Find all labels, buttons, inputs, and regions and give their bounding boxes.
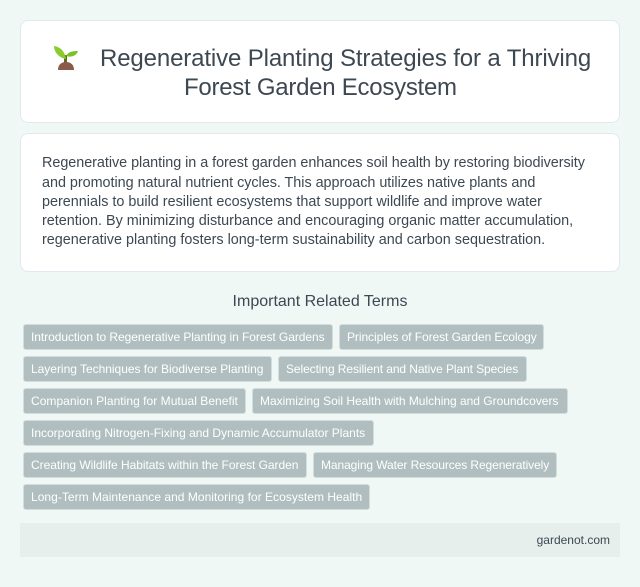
tag: Creating Wildlife Habitats within the Forest Garden (31, 458, 298, 472)
title: Forest Garden Ecosystem (184, 74, 457, 101)
paragraph: regenerative planting fosters long-term sustainability and carbon sequestration. (42, 232, 545, 248)
paragraph: and promoting natural nutrient cycles. This approach utilizes native plants and (42, 175, 535, 191)
section heading: Important Related Terms (233, 293, 407, 310)
intro text panel (20, 133, 620, 272)
tag (23, 484, 370, 510)
tag (23, 452, 307, 478)
paragraph: Regenerative planting in a forest garden enhances soil health by restoring biodiversity (42, 155, 585, 171)
paragraph: perennials to build resilient ecosystems that support wildlife and improve water (42, 194, 542, 210)
related terms tags (23, 324, 568, 510)
tag (252, 388, 568, 414)
tag: Principles of Forest Garden Ecology (347, 330, 537, 344)
tag (23, 356, 272, 382)
tag: Companion Planting for Mutual Benefit (31, 394, 238, 408)
tag (23, 388, 246, 414)
paragraph (42, 155, 585, 248)
tag (278, 356, 527, 382)
title: Regenerative Planting Strategies for a Thriving (100, 45, 591, 72)
icon: seedling (54, 46, 78, 70)
tag: Introduction to Regenerative Planting in Forest Gardens (31, 330, 325, 344)
tag (313, 452, 557, 478)
header panel (20, 20, 620, 123)
tag (23, 324, 333, 350)
tag: Selecting Resilient and Native Plant Species (286, 362, 518, 376)
tag (339, 324, 544, 350)
tag: Long-Term Maintenance and Monitoring for Ecosystem Health (31, 490, 362, 504)
tag: Incorporating Nitrogen-Fixing and Dynamic Accumulator Plants (31, 426, 365, 440)
title (100, 45, 591, 101)
tag: Managing Water Resources Regeneratively (321, 458, 549, 472)
tag: Maximizing Soil Health with Mulching and Groundcovers (260, 394, 558, 408)
footer (20, 523, 620, 557)
source text: gardenot.com (537, 533, 610, 547)
paragraph: retention. By minimizing disturbance and encouraging organic matter accumulation, (42, 213, 573, 229)
tag: Layering Techniques for Biodiverse Planting (31, 362, 263, 376)
tag (23, 420, 374, 446)
